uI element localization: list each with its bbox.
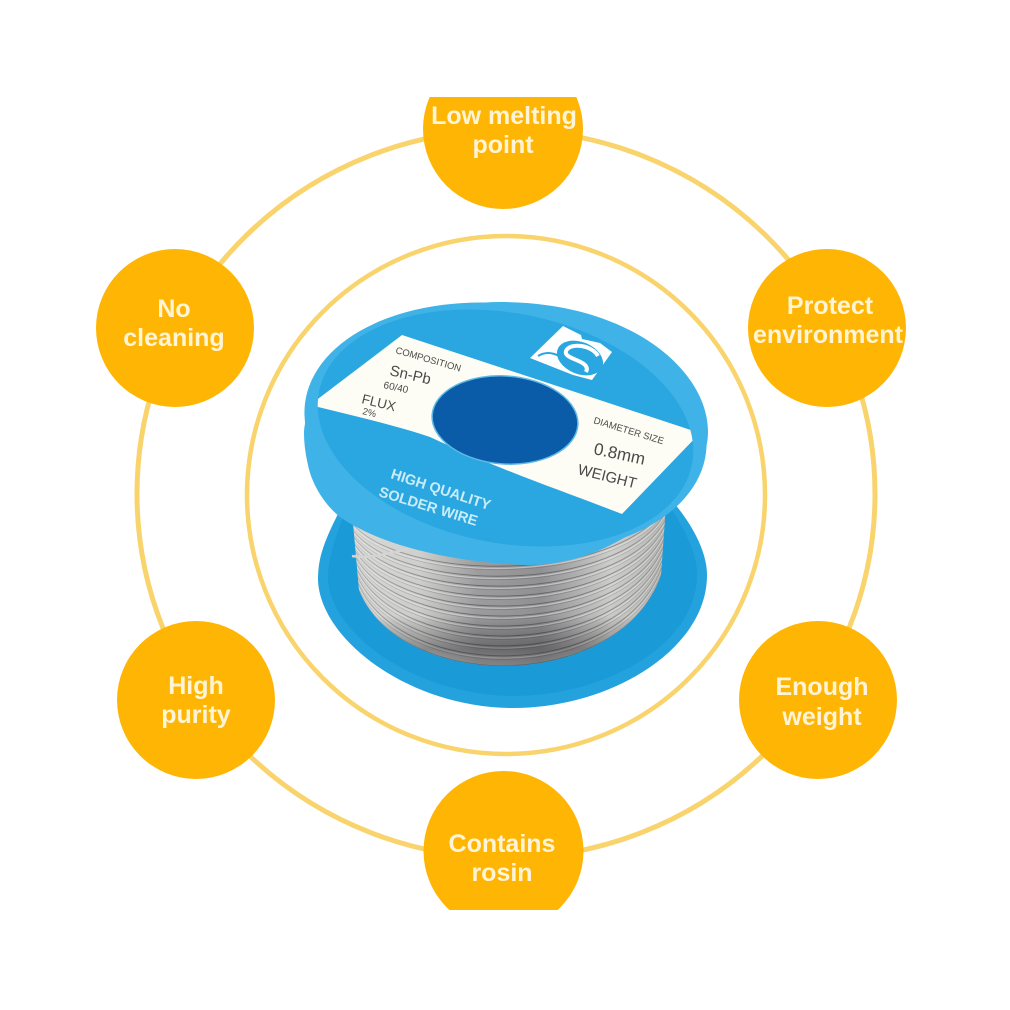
label text: diameter: DIAMETER SIZE xyxy=(592,415,665,447)
label text: composition: FLUX xyxy=(360,391,397,414)
flange slogan xyxy=(377,467,493,530)
callout: low melting point: point xyxy=(472,131,534,159)
label text: composition: COMPOSITION xyxy=(394,345,462,375)
callout: high purity: High xyxy=(168,672,224,700)
label text: composition xyxy=(360,345,462,420)
label text: composition: 2% xyxy=(361,406,378,420)
label text: composition: 60/40 xyxy=(382,380,410,396)
callout: no cleaning: cleaning xyxy=(123,324,225,352)
callout: no cleaning: No xyxy=(157,295,191,323)
callout: contains rosin: Contains xyxy=(449,830,555,858)
label text: diameter: 0.8mm xyxy=(592,439,647,469)
inner ring xyxy=(247,236,765,754)
white label band xyxy=(310,335,700,514)
callout: contains rosin xyxy=(424,771,584,910)
label text: composition: Sn-Pb xyxy=(388,362,433,388)
logo xyxy=(530,326,612,382)
callout: no cleaning xyxy=(96,249,254,407)
callout: low melting point xyxy=(423,97,583,209)
infographic canvas xyxy=(96,97,906,910)
flange slogan: SOLDER WIRE xyxy=(377,485,480,530)
label text: diameter: WEIGHT xyxy=(576,461,638,492)
callout: contains rosin: rosin xyxy=(471,859,533,887)
wire coil xyxy=(353,516,666,666)
callout: protect environment: environment xyxy=(753,321,904,349)
bottom flange xyxy=(318,495,707,708)
callout: high purity xyxy=(117,621,275,779)
label text: diameter xyxy=(576,415,665,492)
callout: enough weight xyxy=(739,621,897,779)
callout: enough weight: Enough xyxy=(775,673,869,701)
loose wire end xyxy=(352,549,408,557)
solder wire spool xyxy=(304,302,708,708)
outer ring xyxy=(137,130,875,858)
top flange rim xyxy=(290,280,721,576)
callout: protect environment xyxy=(748,249,906,407)
callout: protect environment: Protect xyxy=(787,292,874,320)
callout: enough weight: weight xyxy=(781,703,862,731)
callout: high purity: purity xyxy=(161,701,231,729)
top flange face xyxy=(297,279,714,577)
flange slogan: HIGH QUALITY xyxy=(389,467,493,514)
center hole xyxy=(429,371,581,469)
callout: low melting point: Low melting xyxy=(431,102,577,130)
